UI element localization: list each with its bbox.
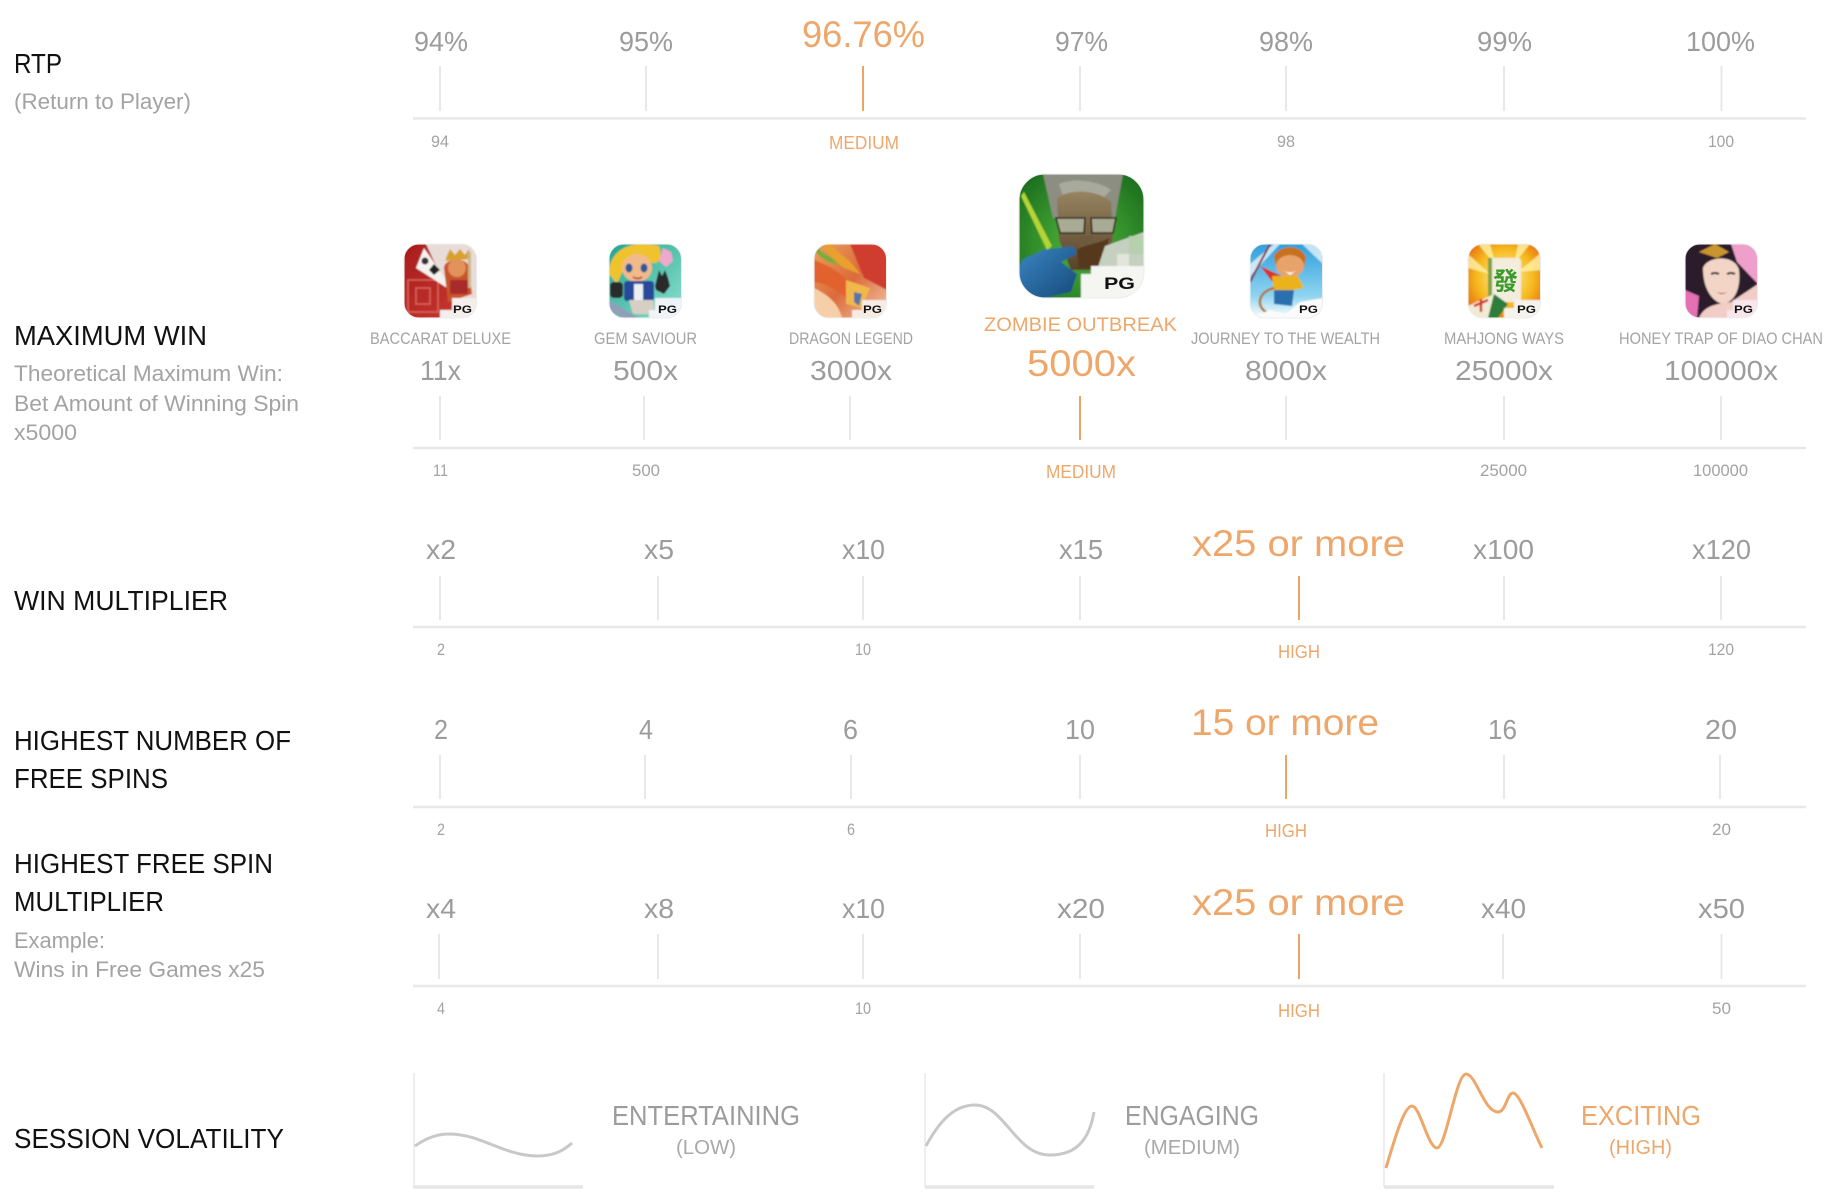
scale values: x40 (1481, 893, 1526, 924)
scale values: 25000x (1455, 355, 1553, 386)
scale labels: MEDIUM (829, 133, 899, 153)
row: Highest Number of Free Spins (14, 702, 1806, 841)
scale values: 100000x (1664, 355, 1778, 386)
scale values: 11x (420, 355, 461, 386)
label: Exciting (High) (1581, 1100, 1701, 1159)
scale values: x4 (426, 893, 456, 924)
scale values: 97% (1055, 26, 1108, 57)
text: Example (14, 928, 265, 982)
scale labels: HIGH (1278, 1001, 1320, 1021)
scale ticks (413, 396, 1806, 448)
heading: Highest Number of Free Spins: FREE SPINS (14, 763, 168, 794)
scale values: x15 (1059, 534, 1103, 565)
text: Maximum win description: Theoretical Maximum Win: (14, 361, 283, 386)
label: Mahjong Ways: MAHJONG WAYS (1444, 329, 1564, 348)
scale labels: 120 (1708, 641, 1734, 659)
scale labels: 25000 (1480, 462, 1527, 480)
icon: Mahjong Ways (1468, 244, 1542, 318)
heading: Highest Free Spin Multiplier: HIGHEST FREE SPIN (14, 848, 273, 879)
scale values: 94% (414, 26, 468, 57)
text: Example: Example: (14, 928, 105, 953)
scale values: 8000x (1245, 355, 1327, 386)
scale labels: 20 (1712, 821, 1731, 839)
scale values (434, 702, 1737, 745)
scale labels: 2 (437, 821, 445, 839)
icon: Baccarat Deluxe (404, 244, 477, 318)
scale labels: HIGH (1278, 642, 1320, 662)
label: Entertaining (Low): ENTERTAINING (612, 1100, 800, 1131)
label: Engaging (Medium) (1125, 1100, 1259, 1159)
icon: Honey Trap of Diao Chan: PG (1734, 304, 1753, 316)
icon: Dragon Legend (814, 244, 887, 318)
scale values (426, 882, 1745, 924)
scale values: 15 or more (1191, 702, 1379, 743)
scale labels (433, 462, 1748, 482)
icon: Journey to the Wealth (1250, 244, 1323, 318)
icon: Mahjong Ways: PG (1517, 304, 1536, 316)
scale values: x5 (644, 534, 674, 565)
scale values: x50 (1698, 893, 1745, 924)
row: Session Volatility (14, 1073, 1701, 1187)
scale labels: 100000 (1693, 462, 1748, 480)
label: Engaging (Medium): ENGAGING (1125, 1100, 1259, 1131)
heading: Highest Free Spin Multiplier: MULTIPLIER (14, 886, 164, 917)
scale values: x25 or more (1192, 882, 1405, 923)
heading: Highest Free Spin Multiplier (14, 848, 273, 917)
scale labels: 6 (847, 821, 855, 839)
row: Win Multiplier (14, 523, 1806, 662)
icon: Honey Trap of Diao Chan (1685, 244, 1758, 318)
scale values: 98% (1259, 26, 1313, 57)
scale values: x8 (644, 893, 674, 924)
scale labels (437, 1000, 1731, 1021)
label: Gem Saviour: GEM SAVIOUR (594, 329, 697, 348)
scale values: x20 (1057, 893, 1105, 924)
chart: high volatility curve (1384, 1073, 1554, 1187)
scale labels: 98 (1277, 133, 1295, 151)
scale values: 20 (1705, 714, 1737, 745)
heading: Win Multiplier: WIN MULTIPLIER (14, 585, 228, 616)
scale labels: 2 (437, 641, 445, 659)
text: Maximum win description (14, 361, 299, 445)
scale values: 10 (1065, 714, 1095, 745)
scale labels: 94 (431, 133, 449, 151)
text: Maximum win description: Bet Amount of Winning Spin (14, 391, 299, 416)
scale values: 500x (613, 355, 678, 386)
scale ticks (413, 576, 1806, 627)
chart: low volatility curve (413, 1073, 583, 1187)
scale labels: MEDIUM (1046, 462, 1116, 482)
scale ticks (413, 755, 1806, 807)
scale labels: 10 (855, 1000, 871, 1018)
label: Exciting (High): EXCITING (1581, 1100, 1701, 1131)
row: Highest Free Spin Multiplier (14, 848, 1806, 1021)
row: RTP (14, 14, 1806, 153)
scale labels: 11 (433, 462, 448, 480)
label: Zombie Outbreak: ZOMBIE OUTBREAK (984, 315, 1177, 336)
scale values: 3000x (810, 355, 892, 386)
text: Maximum win description: x5000 (14, 420, 77, 445)
scale values: 6 (843, 714, 858, 745)
label: Dragon Legend: DRAGON LEGEND (789, 329, 913, 348)
scale values: 2 (434, 714, 448, 745)
label: Journey to the Wealth: JOURNEY TO THE WEALTH (1191, 329, 1380, 348)
scale values: 100% (1686, 26, 1755, 57)
scale values: 5000x (1027, 343, 1137, 384)
scale values: x10 (842, 893, 885, 924)
text: PG logo: PG (1104, 274, 1135, 293)
heading: Highest Number of Free Spins (14, 725, 291, 794)
label: Exciting (High): (HIGH) (1609, 1137, 1672, 1159)
scale labels: 100 (1708, 133, 1734, 151)
scale values: x10 (842, 534, 885, 565)
text: Return to Player: (Return to Player) (14, 89, 191, 114)
scale values: 96.76% (802, 14, 925, 55)
heading: Session Volatility: SESSION VOLATILITY (14, 1123, 284, 1154)
scale labels: 10 (855, 641, 871, 659)
scale values: x25 or more (1192, 523, 1405, 564)
heading: RTP: RTP (14, 48, 62, 79)
icon: Gem Saviour (609, 244, 682, 318)
label: Engaging (Medium): (MEDIUM) (1144, 1137, 1240, 1159)
heading: Maximum Win: MAXIMUM WIN (14, 320, 207, 351)
chart: medium volatility curve (925, 1073, 1094, 1187)
heading: Highest Number of Free Spins: HIGHEST NUMBER OF (14, 725, 291, 756)
label: Entertaining (Low) (612, 1100, 800, 1159)
icon: Zombie Outbreak (1019, 174, 1144, 298)
scale labels (437, 821, 1731, 841)
label: Entertaining (Low): (LOW) (676, 1137, 736, 1159)
scale labels: 50 (1712, 1000, 1731, 1018)
scale labels (431, 133, 1734, 153)
scale values (426, 523, 1751, 565)
scale values: 4 (639, 714, 653, 745)
scale labels: HIGH (1265, 821, 1307, 841)
scale labels: 4 (437, 1000, 445, 1018)
scale values (414, 14, 1755, 57)
scale ticks (413, 934, 1806, 986)
label: Baccarat Deluxe: BACCARAT DELUXE (370, 329, 511, 348)
scale ticks (413, 66, 1806, 118)
scale values: 95% (619, 26, 673, 57)
scale values: x120 (1692, 534, 1751, 565)
scale values: 16 (1488, 714, 1517, 745)
icon: Journey to the Wealth: PG (1299, 304, 1318, 316)
scale labels: 500 (632, 462, 660, 480)
icon: Mahjong Ways: 發 (1493, 262, 1518, 298)
text: Example: Wins in Free Games x25 (14, 957, 265, 982)
scale values: x100 (1473, 534, 1534, 565)
icon: Baccarat Deluxe: PG (453, 304, 472, 316)
icon: Dragon Legend: PG (863, 304, 882, 316)
scale values: 99% (1477, 26, 1532, 57)
scale labels (437, 641, 1734, 662)
row: Maximum Win (14, 174, 1823, 482)
scale values: x2 (426, 534, 456, 565)
scale values (420, 343, 1778, 386)
icon: Gem Saviour: PG (658, 304, 677, 316)
